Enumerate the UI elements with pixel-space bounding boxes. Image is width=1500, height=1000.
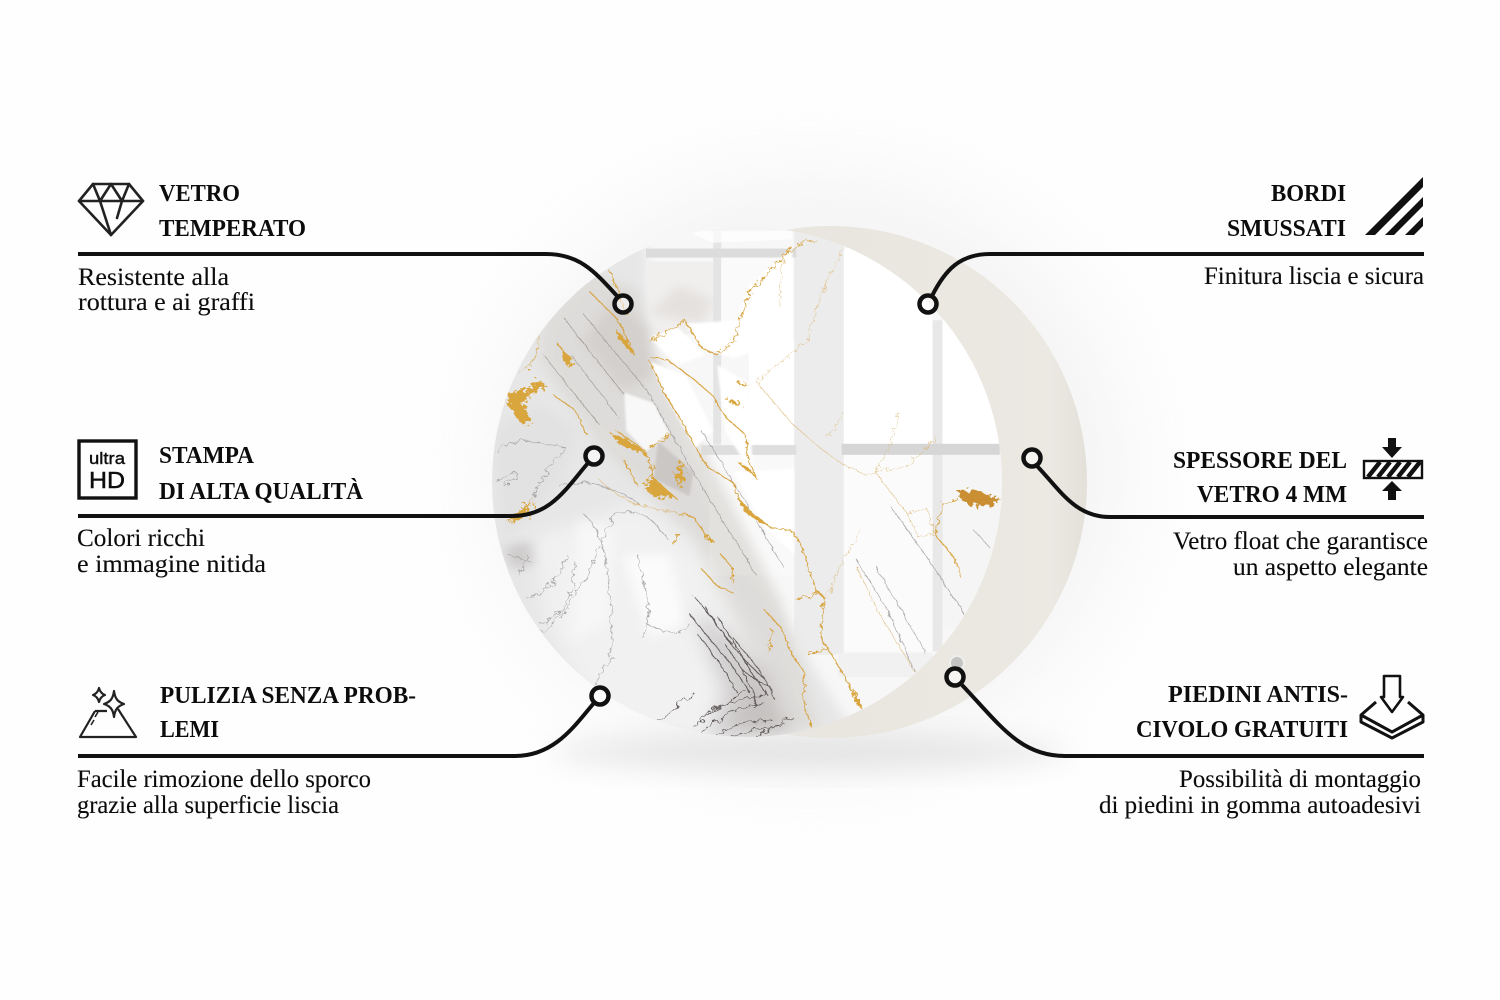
heading: STAMPA [159, 443, 255, 469]
connector: tempered glass [78, 254, 618, 297]
description [77, 525, 266, 578]
connector lines [78, 254, 1424, 756]
white reflective right region [647, 227, 1000, 717]
icon: diamond [79, 184, 143, 235]
gold patches [506, 329, 999, 708]
grey veins [496, 313, 990, 710]
description: grazie alla superficie liscia [77, 792, 339, 819]
metal foot [950, 656, 964, 670]
icon: thickness arrows [1364, 438, 1422, 500]
icon: ultra HD [79, 441, 136, 498]
grey diagonal band [539, 272, 820, 727]
description [1173, 528, 1428, 581]
connector: cleaning [78, 703, 594, 756]
description: e immagine nitida [77, 551, 266, 578]
panel: high quality print [77, 441, 364, 578]
product: round glass panel [492, 224, 1087, 741]
description: un aspetto elegante [1233, 554, 1428, 581]
heading: TEMPERATO [159, 216, 306, 242]
glare at top [713, 231, 722, 242]
panel: tempered glass [78, 181, 306, 316]
heading [1173, 448, 1347, 508]
soft glow behind product [490, 170, 1130, 770]
heading: DI ALTA QUALITÀ [159, 479, 364, 505]
description: Resistente alla [78, 264, 229, 291]
lower left marble cloud [492, 403, 579, 541]
floor shadow [550, 734, 1070, 770]
connector: thickness [1037, 466, 1424, 517]
heading: BORDI [1271, 181, 1346, 207]
description: Facile rimozione dello sporco [77, 766, 371, 793]
panel: easy cleaning [77, 683, 416, 819]
gold veins [527, 239, 962, 727]
connector: high quality print [78, 463, 588, 516]
description: Finitura liscia e sicura [1204, 263, 1424, 290]
connector: bevelled edges [932, 254, 1424, 296]
heading [159, 443, 364, 505]
description: Vetro float che garantisce [1173, 528, 1428, 555]
icon: ultra HD: ultra [89, 449, 126, 468]
heading [1136, 682, 1348, 743]
window panes reflection [646, 231, 1002, 677]
description: Possibilità di montaggio [1179, 766, 1421, 793]
heading: VETRO 4 MM [1197, 482, 1347, 508]
dark veins [658, 596, 792, 738]
description: rottura e ai graffi [78, 289, 255, 316]
panel: glass thickness [1173, 438, 1428, 581]
heading: PULIZIA SENZA PROB- [160, 683, 416, 709]
back plate crescent [575, 226, 1087, 738]
description [77, 766, 371, 819]
heading: SPESSORE DEL [1173, 448, 1347, 474]
heading [159, 181, 306, 242]
heading [160, 683, 416, 743]
marble disc [492, 224, 1033, 741]
thin gold veins [520, 248, 937, 672]
heading: PIEDINI ANTIS- [1168, 682, 1348, 708]
panel: anti-slip feet [1099, 676, 1423, 819]
heading: CIVOLO GRATUITI [1136, 717, 1348, 743]
icon: bevel stripes [1365, 177, 1423, 235]
heading [1227, 181, 1346, 242]
panel: bevelled edges [1204, 177, 1424, 290]
heading: LEMI [160, 717, 219, 743]
heading: SMUSSATI [1227, 216, 1346, 242]
white islands [624, 248, 793, 455]
dark smoky patch [693, 610, 792, 734]
icon: ultra HD: HD [89, 467, 125, 493]
connector: feet [962, 685, 1424, 756]
description: di piedini in gomma autoadesivi [1099, 792, 1421, 819]
description [1099, 766, 1421, 819]
description [78, 264, 255, 316]
heading: VETRO [159, 181, 240, 207]
connector markers [586, 296, 1040, 704]
icon: sparkling surface [80, 688, 136, 737]
description: Colori ricchi [77, 525, 205, 552]
icon: arrow onto plate [1361, 676, 1423, 738]
